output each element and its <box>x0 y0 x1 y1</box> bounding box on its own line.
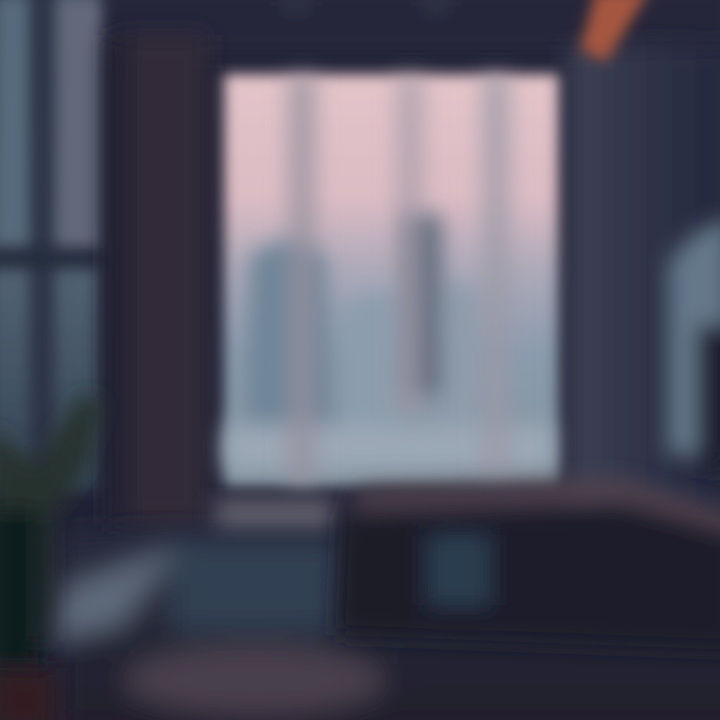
floor <box>50 535 720 720</box>
plant <box>0 395 105 670</box>
plant pot <box>0 668 55 720</box>
central window <box>224 74 560 486</box>
sofa <box>335 478 720 650</box>
dark column <box>105 35 207 525</box>
orange light streak <box>580 0 650 62</box>
city skyline <box>224 215 554 470</box>
window sill <box>215 498 335 532</box>
window mullions <box>288 75 510 485</box>
ceiling <box>0 0 720 55</box>
left window <box>0 0 105 490</box>
right wall <box>568 45 720 515</box>
right window glimpse <box>668 218 720 470</box>
